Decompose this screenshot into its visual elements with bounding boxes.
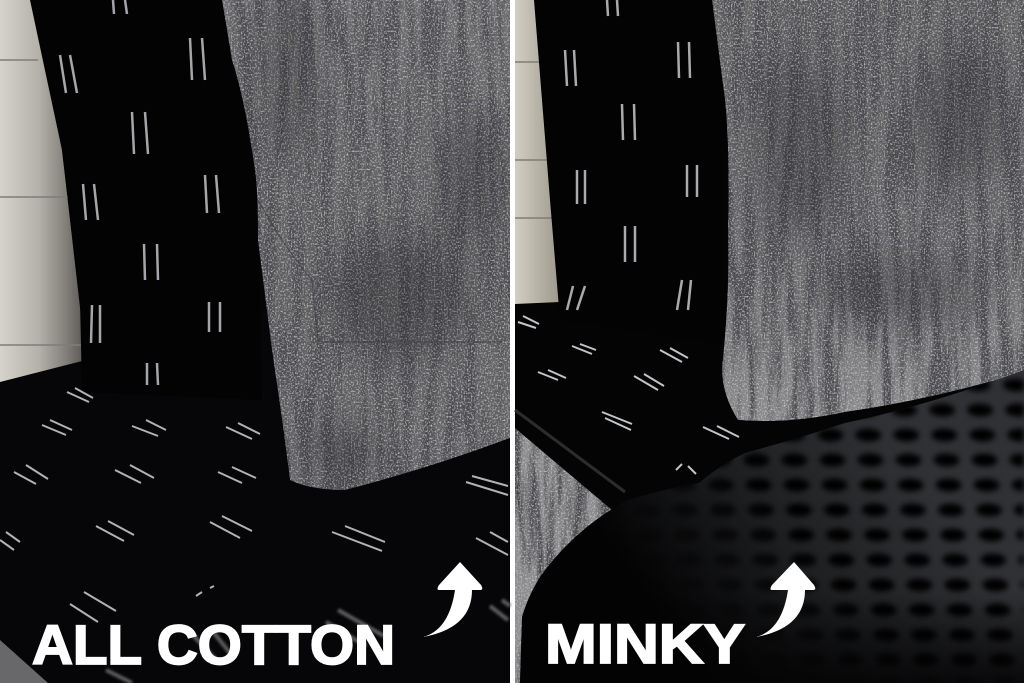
label: all cotton: ALL COTTON xyxy=(32,613,395,676)
wall: white wood planks xyxy=(515,0,560,304)
gray patterned pillow xyxy=(222,0,510,490)
arrow: points to minky fabric xyxy=(756,562,815,637)
arrow: points to cotton fabric xyxy=(423,562,482,637)
minky blanket xyxy=(515,360,1024,683)
wall: white wood planks xyxy=(0,0,86,382)
label: minky: MINKY xyxy=(545,612,745,675)
all cotton blurred stitches xyxy=(106,600,510,683)
gray comforter with piping xyxy=(515,410,625,683)
comforter corner xyxy=(0,640,48,683)
all cotton sheet pattern xyxy=(0,388,508,622)
gray patterned pillow xyxy=(712,0,1024,421)
black patterned pillow xyxy=(534,0,726,345)
minky sheet pattern xyxy=(518,316,739,474)
panel: all cotton photo xyxy=(0,0,510,683)
black patterned pillow xyxy=(30,0,262,400)
panel: minky photo xyxy=(515,0,1024,683)
